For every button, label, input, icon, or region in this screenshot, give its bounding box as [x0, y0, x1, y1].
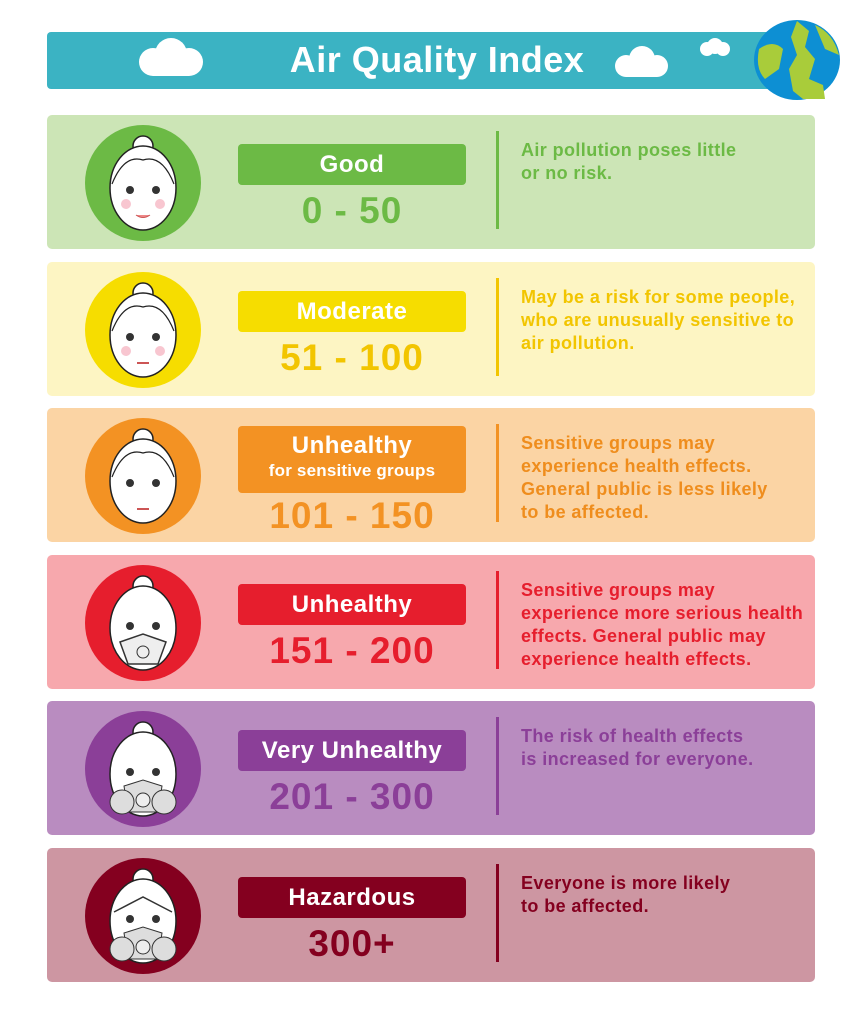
range: 101 - 150 — [269, 495, 435, 536]
label: Hazardous — [288, 884, 416, 911]
range: 51 - 100 — [280, 337, 424, 378]
description — [521, 726, 754, 769]
description: General public is less likely — [521, 479, 768, 499]
description: Everyone is more likely — [521, 873, 730, 893]
icon: face respirator — [85, 711, 201, 827]
label: Unhealthy — [292, 432, 412, 459]
cloud right — [615, 46, 668, 77]
description: experience more serious health — [521, 603, 803, 623]
label: for sensitive groups — [269, 461, 435, 480]
panel: unhealthy — [47, 555, 815, 689]
label: Unhealthy — [292, 591, 412, 618]
description — [521, 140, 736, 183]
description: experience health effects. — [521, 456, 752, 476]
icon: face usg — [85, 418, 201, 534]
description: experience health effects. — [521, 649, 752, 669]
description: Sensitive groups may — [521, 433, 715, 453]
icon: face moderate — [85, 272, 201, 388]
title: Air Quality Index — [290, 39, 584, 80]
description: Air pollution poses little — [521, 140, 736, 160]
description: May be a risk for some people, — [521, 287, 795, 307]
description — [521, 873, 730, 916]
description: air pollution. — [521, 333, 635, 353]
icon: face respirator — [85, 858, 201, 974]
label: Very Unhealthy — [262, 737, 442, 764]
description: effects. General public may — [521, 626, 766, 646]
icon: face mask — [85, 565, 201, 681]
range: 201 - 300 — [269, 776, 435, 817]
label — [238, 584, 466, 625]
panel: very unhealthy — [47, 701, 815, 835]
label: Good — [320, 151, 384, 178]
label — [238, 426, 466, 493]
description: or no risk. — [521, 163, 612, 183]
label — [238, 291, 466, 332]
label — [238, 877, 466, 918]
range: 0 - 50 — [302, 190, 402, 231]
description: The risk of health effects — [521, 726, 743, 746]
panel: moderate — [47, 262, 815, 396]
description: Sensitive groups may — [521, 580, 715, 600]
icon: face good — [85, 125, 201, 241]
description: is increased for everyone. — [521, 749, 754, 769]
header bar — [47, 32, 777, 89]
description: who are unusually sensitive to — [521, 310, 794, 330]
range: 151 - 200 — [269, 630, 435, 671]
panel: unhealthy for sensitive groups — [47, 408, 815, 542]
description — [521, 287, 795, 353]
panel: hazardous — [47, 848, 815, 982]
range: 300+ — [308, 923, 396, 964]
small cloud — [700, 38, 730, 56]
description: to be affected. — [521, 896, 649, 916]
description: to be affected. — [521, 502, 649, 522]
panel: good — [47, 115, 815, 249]
icon: globe — [754, 20, 840, 100]
description — [521, 580, 803, 669]
label — [238, 730, 466, 771]
label: Moderate — [297, 298, 407, 325]
description — [521, 433, 768, 522]
cloud left — [139, 38, 203, 76]
label — [238, 144, 466, 185]
